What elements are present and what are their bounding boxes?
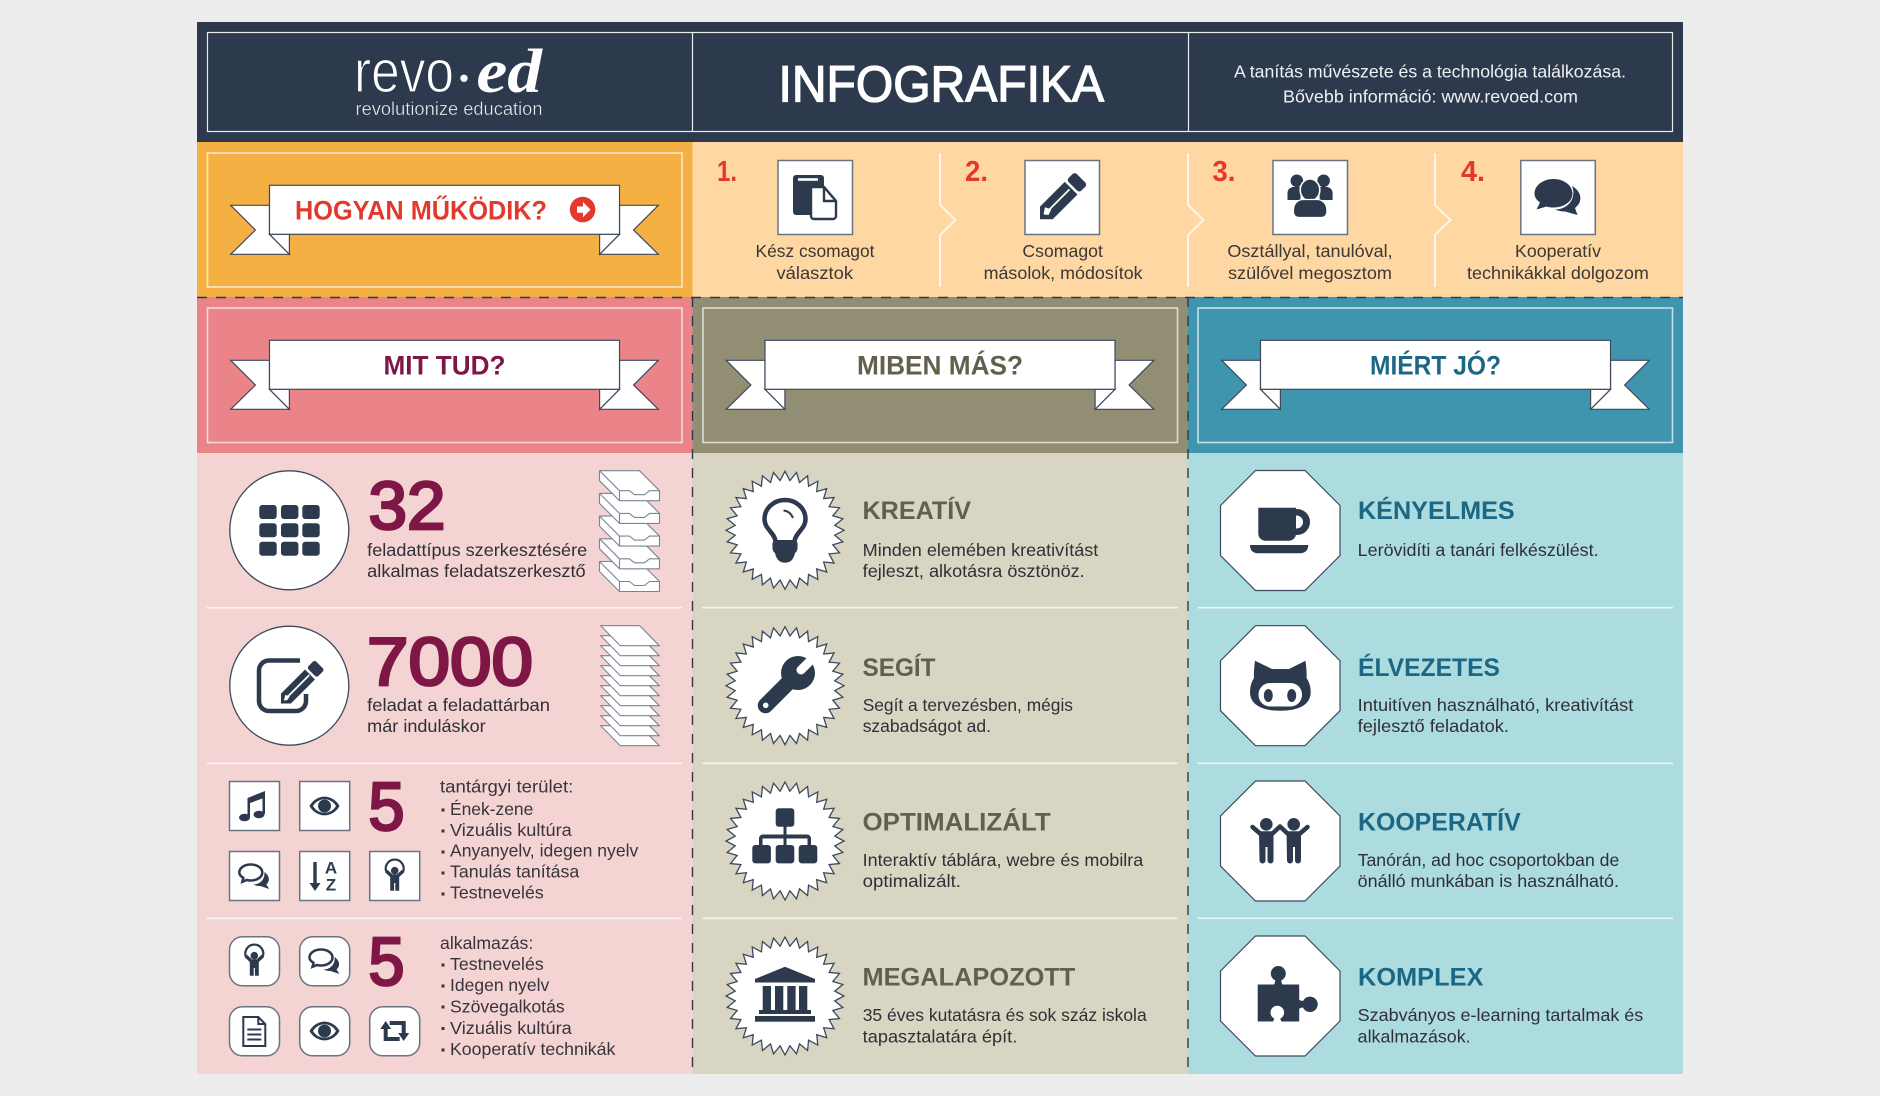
icon: arrow circle (570, 197, 595, 222)
ribbon: hogyan működik: HOGYAN MŰKÖDIK? (295, 194, 547, 226)
ribbon: miért jó: MIÉRT JÓ? (1370, 350, 1501, 380)
step 2: másolok, módosítok (984, 263, 1143, 283)
icon: lightbulb (764, 500, 806, 563)
heading: élvezetes: ÉLVEZETES (1358, 653, 1500, 682)
heading: segít: SEGÍT (862, 653, 936, 682)
icon tile: sort A-Z: A (325, 858, 337, 878)
step 4: Kooperatív (1515, 241, 1601, 261)
list: subject areas: tantárgyi terület: (440, 777, 573, 797)
panel: miben más header (692, 297, 1188, 453)
text: megalapozott: tapasztalatára épít. (863, 1027, 1017, 1047)
icon: bank (755, 967, 815, 1022)
description: 32: alkalmas feladatszerkesztő (367, 561, 586, 581)
icon tile: music (230, 782, 280, 830)
number: 7000: 7000 (367, 624, 533, 700)
list: applications: Idegen nyelv (450, 975, 550, 995)
item: segít (726, 627, 1073, 745)
item: megalapozott (726, 937, 1147, 1055)
step 1: választok (776, 263, 853, 283)
panel: four steps (692, 142, 1683, 297)
list: applications (440, 933, 616, 1059)
icon tile: document rounded (230, 1007, 280, 1056)
badge: octagon (1220, 470, 1340, 590)
list: subject areas: Testnevelés (450, 883, 544, 903)
heading: komplex: KOMPLEX (1358, 964, 1484, 992)
list: subject areas: Vizuális kultúra (450, 820, 572, 840)
list: subject areas: Tanulás tanítása (450, 862, 580, 882)
row: 32 task types (230, 468, 660, 592)
list: applications: Szövegalkotás (450, 996, 565, 1016)
logo (354, 38, 543, 119)
text: kooperatív (1358, 850, 1619, 891)
badge: octagon (1220, 781, 1340, 901)
icon: cup (1250, 508, 1310, 553)
icon: stack of sheets (601, 626, 659, 746)
icon: group of people (1288, 174, 1333, 218)
step 2: 2. (965, 156, 988, 188)
text: kooperatív: Tanórán, ad hoc csoportokban de (1358, 850, 1619, 870)
item: optimalizált (726, 782, 1144, 900)
step 2: Csomagot (1022, 241, 1103, 261)
badge: octagon (1220, 936, 1340, 1056)
item: élvezetes (1220, 626, 1633, 746)
icon tile: chat rounded (300, 937, 350, 986)
description: 32: feladattípus szerkesztésére (367, 540, 587, 560)
step 1 (717, 156, 875, 283)
text: komplex (1358, 1005, 1644, 1047)
icon tile: eye rounded (300, 1007, 350, 1056)
row: 5 applications (230, 924, 616, 1059)
list: applications: Vizuális kultúra (450, 1018, 572, 1038)
title: INFOGRAFIKA (778, 56, 1104, 112)
ribbon: miben más: MIBEN MÁS? (857, 350, 1023, 380)
badge: starburst (726, 937, 844, 1055)
text: megalapozott: 35 éves kutatásra és sok száz iskola (863, 1005, 1147, 1025)
text: segít: szabadságot ad. (863, 716, 991, 736)
logo: revolutionize education (356, 99, 542, 119)
logo: revo (354, 38, 454, 105)
text: kényelmes: Lerövidíti a tanári felkészülést. (1358, 540, 1599, 560)
heading: kooperatív: KOOPERATÍV (1358, 808, 1521, 836)
list: applications: Kooperatív technikák (450, 1039, 616, 1059)
step 1: 1. (717, 156, 737, 188)
description: 7000: feladat a feladattárban (367, 695, 550, 715)
icon: copy documents (793, 175, 836, 219)
row: 7000 tasks (230, 624, 659, 746)
header tagline: A tanítás művészete és a technológia találkozása. (1234, 62, 1626, 82)
icon: stack of trays (600, 471, 660, 592)
panel: header (197, 22, 1683, 142)
text: komplex: Szabványos e-learning tartalmak és (1358, 1005, 1644, 1025)
icon: edit (259, 660, 324, 711)
step 4 (1461, 156, 1649, 283)
row: 5 subject areas (230, 769, 639, 903)
list: applications: alkalmazás: (440, 933, 533, 953)
text: optimalizált: Interaktív táblára, webre és mobilra (863, 850, 1144, 870)
ribbon: hogyan működik (231, 185, 658, 254)
heading: optimalizált: OPTIMALIZÁLT (862, 808, 1051, 836)
text: kreatív (863, 540, 1098, 581)
icon tile: person rounded (230, 937, 280, 986)
text: optimalizált (863, 850, 1144, 891)
ribbon: mit tud: MIT TUD? (384, 350, 506, 380)
icon: wrench (763, 654, 817, 708)
number: 32: 32 (368, 468, 446, 544)
panel: mit tud header (197, 297, 692, 453)
icon: pencil (1034, 172, 1087, 226)
panel: miben más content (692, 453, 1188, 1074)
text: megalapozott (863, 1005, 1147, 1047)
badge: starburst (726, 471, 844, 589)
text: komplex: alkalmazások. (1358, 1027, 1471, 1047)
item: kényelmes (1220, 470, 1599, 590)
text: élvezetes: Intuitíven használható, kreativítást (1358, 695, 1633, 715)
list: subject areas (440, 777, 639, 903)
description: 32 (367, 540, 587, 581)
ribbon: miért jó (1222, 340, 1649, 409)
logo: ed (476, 38, 543, 106)
step chevron dividers (940, 153, 1450, 287)
icon tile: person (370, 852, 420, 900)
panel: how it works heading (197, 142, 692, 297)
step 3: Osztállyal, tanulóval, (1227, 241, 1393, 261)
panel: miért jó header (1188, 297, 1683, 453)
heading: kreatív: KREATÍV (862, 496, 971, 525)
icon: two children (1252, 818, 1308, 864)
icon tile: retweet rounded (370, 1007, 420, 1056)
badge: octagon (1220, 626, 1340, 746)
icon: octocat (1250, 661, 1311, 711)
description: 7000 (367, 695, 550, 736)
dashed cut lines (197, 297, 1683, 1074)
step 4: 4. (1461, 156, 1485, 188)
step 3: 3. (1212, 156, 1235, 188)
number: 5 subjects: 5 (368, 769, 404, 845)
item: kreatív (726, 471, 1098, 589)
text: kreatív: Minden elemében kreativítást (863, 540, 1098, 560)
icon tile: eye (300, 782, 350, 830)
step 3 (1212, 156, 1393, 283)
text: kooperatív: önálló munkában is használható. (1358, 871, 1619, 891)
icon tile: sort A-Z: Z (326, 876, 336, 894)
icon: puzzle piece (1258, 966, 1318, 1022)
badge: starburst (726, 782, 844, 900)
step 2 (965, 156, 1143, 283)
step 3: szülővel megosztom (1228, 263, 1392, 283)
header tagline: Bővebb információ: www.revoed.com (1283, 86, 1578, 106)
text: segít (863, 695, 1073, 736)
text: kreatív: fejleszt, alkotásra ösztönöz. (863, 561, 1085, 581)
text: élvezetes: fejlesztő feladatok. (1358, 716, 1509, 736)
icon: hierarchy (752, 808, 817, 863)
heading: kényelmes: KÉNYELMES (1358, 496, 1515, 525)
panel: mit tud content (197, 453, 692, 1074)
ribbon: miben más (726, 340, 1154, 409)
panel: miért jó content (1188, 453, 1683, 1074)
list: subject areas: Anyanyelv, idegen nyelv (450, 841, 639, 861)
badge: starburst (726, 627, 844, 745)
icon: grid (259, 505, 320, 556)
number: 5 applications: 5 (368, 924, 404, 1000)
text: optimalizált: optimalizált. (863, 871, 961, 891)
list: subject areas: Ének-zene (450, 799, 533, 819)
icon: chat bubbles (1534, 179, 1580, 215)
item: kooperatív (1220, 781, 1619, 901)
ribbon: mit tud (231, 340, 658, 409)
text: élvezetes (1358, 695, 1633, 736)
icon tile: sort A-Z (300, 852, 350, 900)
step 4: technikákkal dolgozom (1467, 263, 1649, 283)
icon tile: chat (230, 852, 280, 900)
list: applications: Testnevelés (450, 954, 544, 974)
step 1: Kész csomagot (756, 241, 875, 261)
text: segít: Segít a tervezésben, mégis (863, 695, 1073, 715)
item: komplex (1220, 936, 1644, 1056)
heading: megalapozott: MEGALAPOZOTT (862, 964, 1075, 992)
description: 7000: már induláskor (367, 716, 486, 736)
header tagline (1234, 62, 1626, 106)
